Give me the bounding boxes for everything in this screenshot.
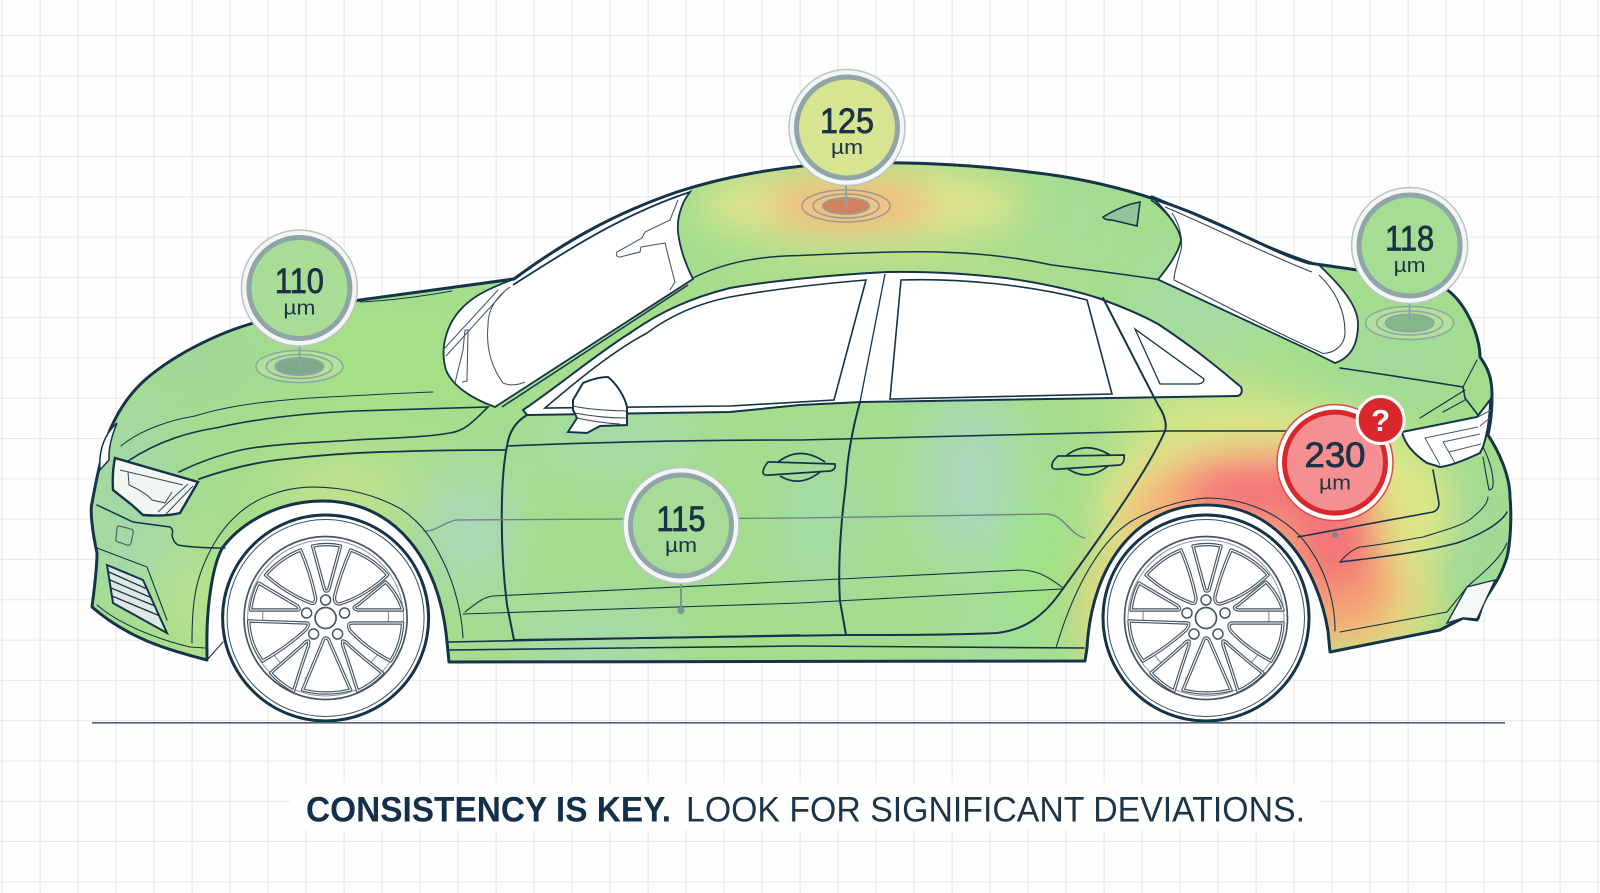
front headlight xyxy=(100,423,198,516)
ground line xyxy=(92,722,1505,724)
body crease and door lines xyxy=(97,291,1507,660)
windshield xyxy=(443,187,693,407)
pin: 118 um trunk xyxy=(1352,188,1468,340)
door handle rear xyxy=(1052,448,1124,475)
warning badge: ? xyxy=(1371,403,1390,438)
fog lamp grille and tow cover xyxy=(107,526,167,633)
pin: 115 um door: µm xyxy=(665,535,697,557)
pin: 110 um hood: 110 xyxy=(275,262,324,301)
pin: 110 um hood: µm xyxy=(283,298,315,320)
pin: 118 um trunk: 118 xyxy=(1385,220,1434,258)
pin: 115 um door: 115 xyxy=(656,500,706,539)
side window frame xyxy=(523,272,1242,415)
caption backing xyxy=(290,783,1320,830)
car illustration xyxy=(80,150,1520,721)
pin: 115 um door xyxy=(623,468,739,614)
pin: 230 um warning: 230 xyxy=(1304,436,1366,475)
side mirror xyxy=(568,377,627,433)
rear windscreen xyxy=(1151,196,1358,363)
caption: LOOK FOR SIGNIFICANT DEVIATIONS. xyxy=(686,790,1305,830)
antenna xyxy=(1103,202,1140,226)
warning badge xyxy=(1357,396,1404,444)
rear wheel xyxy=(1103,515,1309,721)
door handle front xyxy=(763,454,835,481)
pin: 125 um roof: 125 xyxy=(820,102,874,141)
pin: 125 um roof xyxy=(789,70,905,222)
wheel arch backing xyxy=(206,501,1332,662)
thickness heatmap on body xyxy=(80,150,1520,680)
roof panel lines xyxy=(693,200,1181,280)
rear taillight xyxy=(1402,400,1491,467)
pin: 230 um warning xyxy=(1277,396,1404,538)
rear diffuser xyxy=(1447,580,1495,623)
pin: 110 um hood xyxy=(241,230,357,382)
pin: 125 um roof: µm xyxy=(831,137,863,159)
caption xyxy=(306,790,1305,830)
pin: 118 um trunk: µm xyxy=(1394,255,1426,277)
body outline xyxy=(91,163,1511,662)
pin: 230 um warning: µm xyxy=(1319,473,1351,495)
front wheel xyxy=(223,515,429,721)
caption: CONSISTENCY IS KEY. xyxy=(306,790,671,830)
